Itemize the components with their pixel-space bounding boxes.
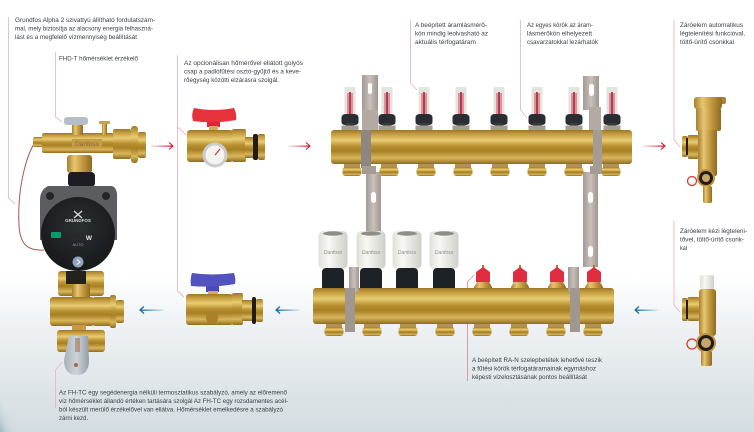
text: RA-N inserts: képesti vízelosztásának pontos beállítását (472, 374, 587, 381)
text: automatic end piece: töltő-ürítő csonkkal (680, 39, 734, 46)
upper mixing valve (33, 117, 146, 173)
thermal actuators: Danfoss (435, 250, 454, 256)
thermal actuators: Danfoss (398, 250, 417, 256)
text: manual end piece (680, 228, 747, 252)
arrow: blue 3 (635, 306, 658, 314)
thermal actuators: Danfoss (324, 250, 343, 256)
pump housing: GRUNDFOS (65, 218, 91, 223)
outlet ports (324, 323, 602, 336)
text: flow meters: A beépített áramlásmérő- (415, 22, 487, 29)
pump housing: AUTO (72, 242, 84, 247)
text: flow meters: kön mindig leolvasható az (415, 30, 488, 38)
text: Grundfos pump: lást és a megfelelő vízmennyiség beállítását (15, 34, 137, 41)
text: RA-N inserts (472, 357, 603, 381)
clamps (345, 267, 580, 332)
text: circuit shutoff: csavarzatokkal lezárhatók (527, 39, 599, 46)
manifold tube (331, 130, 632, 164)
text: ball valve (184, 60, 303, 84)
RA-N valves (474, 265, 603, 294)
outlet ports (342, 163, 620, 176)
text: Grundfos pump: Grundfos Alpha 2 szivattyú állítható fordulatszám- (15, 17, 155, 24)
text: automatic end piece: Záróelem automatikus (680, 22, 743, 29)
text: FHD-T sensor: FHD-T hőmérséklet érzékelő (59, 56, 138, 62)
text: FH-TC regulator (59, 390, 288, 422)
text: circuit shutoff (527, 22, 599, 46)
manifold tube (313, 288, 614, 324)
icon: automatic air vent end piece (682, 97, 726, 203)
arrow: red 3 (642, 142, 665, 150)
clamps (361, 107, 602, 174)
text: automatic end piece: légtelenítési funkcióval, (680, 30, 745, 38)
text: flow meters (415, 22, 488, 46)
pump housing (40, 186, 117, 271)
text: FH-TC regulator: ból készült merülő érzékelővel van ellátva. Hőmérséklet emelkedésre a szabályzó (59, 406, 283, 414)
upper mixing valve: Danfoss (75, 141, 100, 148)
text: RA-N inserts: a fűtési körök térfogatáramainak egymáshoz (472, 366, 596, 372)
text: automatic end piece (680, 22, 745, 46)
text: circuit shutoff: lásmérőkön elhelyezett (527, 30, 592, 38)
icon: manual air vent end piece (682, 275, 716, 366)
text: FH-TC regulator: Az FH-TC egy segédenergia nélküli termosztatikus szabályzó, amely az előremenő (59, 390, 287, 396)
text: ball valve: csap a padlófűtési osztó-gyűjtő és a keve- (184, 68, 301, 76)
icon: blue ball valve (186, 273, 263, 325)
text: Grundfos pump: mal, mely biztosítja az alacsony energia felhaszná- (15, 26, 153, 32)
arrow: blue 2 (276, 306, 300, 314)
text: manual end piece: tővel, töltő-ürítő csonk- (680, 236, 744, 244)
arrow: red 2 (288, 142, 310, 150)
text: flow meters: aktuális térfogatáram (415, 39, 476, 46)
text: manual end piece: Záróelem kézi légteleni- (680, 228, 747, 235)
text: ball valve: Az opcionálisan hőmérővel ellátott golyós (184, 60, 303, 67)
text: Grundfos pump (15, 17, 155, 41)
text: FH-TC regulator: zárni kezd. (59, 415, 88, 422)
arrow: red 1 (150, 142, 173, 150)
mounting brackets (362, 75, 599, 267)
capillary wire (19, 140, 44, 250)
FH-TC sensor (64, 336, 89, 375)
pump housing: W (86, 235, 93, 242)
text: manual end piece: kal (680, 245, 687, 252)
thermal actuators (318, 231, 458, 292)
flow meters (342, 87, 620, 130)
icon: red ball valve with thermometer (187, 108, 265, 168)
text: ball valve: rőegység közötti elzárásra szolgál. (184, 77, 279, 84)
icon: lower manifold with actuators and valves (313, 231, 614, 336)
arrow: blue 1 (140, 306, 164, 314)
thermal actuators: Danfoss (362, 250, 381, 256)
icon: pump assembly (19, 117, 146, 375)
pump neck (68, 172, 95, 187)
lower body (50, 271, 124, 352)
text: RA-N inserts: A beépített RA-N szelepbetétek lehetővé teszik (472, 357, 603, 364)
text: circuit shutoff: Az egyes körök az áram- (527, 22, 593, 29)
icon: upper manifold with flow meters (331, 75, 632, 267)
text: FH-TC regulator: víz hőmérséklet állandó értéken tartására szolgál Az FH-TC egy rozsdamentes acél- (59, 398, 288, 405)
